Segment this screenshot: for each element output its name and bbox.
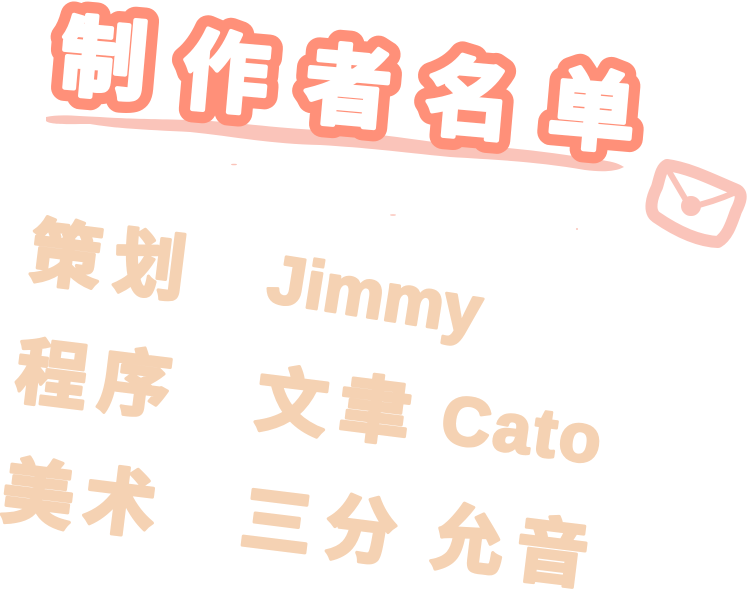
label: 程序: 程 (11, 332, 92, 420)
name: Jimmy: Jimmy (263, 241, 488, 349)
name: 文聿 Cato: 文 (251, 360, 332, 448)
name: 三分 允音 (236, 479, 592, 594)
title: 制作者名单: 者 (300, 36, 395, 141)
label: 策划: 策 (25, 213, 106, 301)
label: 美术 (0, 452, 160, 548)
label: 程序 (11, 332, 175, 429)
title: 制作者名单: 单 (544, 60, 639, 165)
decorative specks (231, 164, 578, 230)
title underline brush stroke (46, 115, 624, 171)
name: 文聿 Cato: Cato (437, 381, 609, 479)
title: 制作者名单: 制 (56, 8, 151, 113)
label: 美术: 术 (79, 460, 160, 548)
title: 制作者名单: 作 (178, 22, 273, 127)
name: 三分 允音: 分 (320, 488, 401, 576)
icon: envelope (651, 165, 741, 242)
title: 制作者名单: 作 (178, 22, 273, 127)
title: 制作者名单: 制 (56, 8, 151, 113)
title: 制作者名单: 名 (421, 48, 516, 153)
label: 程序: 序 (94, 341, 175, 429)
title: 制作者名单 (56, 8, 639, 165)
name: 三分 允音: 三 (236, 479, 317, 567)
title: 制作者名单: 者 (300, 36, 395, 141)
name: 文聿 Cato (251, 360, 609, 479)
label: 策划 (25, 213, 190, 311)
label: 策划: 划 (109, 223, 190, 311)
title: 制作者名单: 单 (544, 60, 639, 165)
title: 制作者名单: 名 (421, 48, 516, 153)
name: 三分 允音: 允 (427, 498, 508, 586)
name: 文聿 Cato: 聿 (334, 368, 415, 456)
